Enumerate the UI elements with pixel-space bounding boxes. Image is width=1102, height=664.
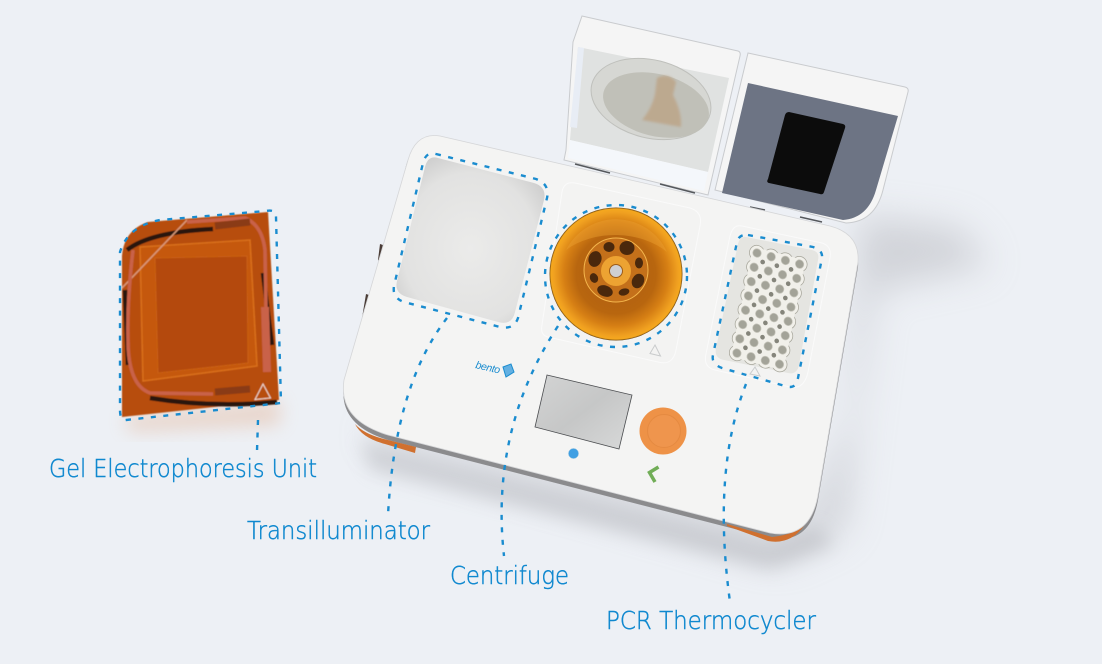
- label: PCR Thermocycler: PCR Thermocycler: [606, 606, 817, 635]
- transilluminator: [396, 157, 545, 323]
- warning icon: centrifuge: [650, 345, 660, 356]
- gel warning icon: [255, 384, 270, 400]
- orange button: [640, 408, 686, 454]
- recess: centrifuge: [542, 183, 701, 363]
- lid frame: [715, 53, 908, 223]
- device side: [343, 141, 858, 539]
- gel tray inner: [155, 256, 248, 373]
- gel plug: [265, 307, 267, 372]
- gel case: [122, 212, 279, 417]
- rotor upper highlight: [566, 219, 667, 252]
- leader: transilluminator: [388, 318, 447, 515]
- side buttons: [362, 244, 383, 320]
- status LED: [568, 448, 578, 458]
- shadow: device: [360, 215, 990, 570]
- rotor inner ring: [584, 238, 648, 302]
- lid reflection disc: [582, 46, 720, 152]
- lid rotor reflection: [642, 76, 681, 127]
- logo icon: [503, 364, 514, 377]
- lid lower lip: [568, 140, 708, 191]
- lid grey panel: [722, 83, 898, 220]
- right lid: thermocycler: [715, 53, 908, 223]
- plate lobes: [728, 244, 808, 374]
- gel lid crease: [122, 220, 187, 288]
- lid window: [570, 47, 729, 172]
- gel red wire: [128, 218, 266, 394]
- gel dark cable: [125, 229, 277, 404]
- rotor hub: [601, 256, 631, 286]
- gel tray frame: [140, 240, 257, 381]
- large wells: [732, 248, 805, 369]
- dashed outline: transilluminator: [394, 153, 548, 328]
- label: Centrifuge: Centrifuge: [450, 561, 569, 590]
- plate centre: [731, 247, 806, 370]
- shadow: gel unit: [124, 400, 280, 432]
- foot: right: [727, 524, 804, 542]
- device body: [343, 136, 858, 534]
- logo: bento: bento: [474, 359, 502, 377]
- lid black window: [767, 112, 845, 194]
- display screen: [535, 375, 632, 449]
- small wells: [743, 259, 794, 358]
- dashed outline: centrifuge: [545, 205, 687, 347]
- recess: thermocycler: [705, 226, 830, 387]
- foot: left: [355, 424, 416, 453]
- PCR well plate: [728, 244, 808, 374]
- green chevron: [650, 467, 658, 482]
- leader: gel unit: [257, 420, 258, 451]
- lid window left glow: [570, 47, 584, 128]
- logo: bento: [474, 359, 514, 377]
- rotor spindle: [610, 264, 622, 278]
- gel electrophoresis unit: [122, 212, 279, 417]
- label: Gel Electrophoresis Unit: Gel Electrophoresis Unit: [49, 454, 317, 483]
- thermocycler bed: [716, 237, 818, 373]
- lid reflection inner: [596, 62, 716, 148]
- dashed outline: gel unit: [120, 211, 281, 420]
- hinge marks: [575, 164, 822, 222]
- label: Transilluminator: Transilluminator: [247, 516, 431, 545]
- centrifuge rotor: [550, 208, 682, 340]
- lid frame: [564, 16, 740, 195]
- rotor tube holes: [587, 241, 647, 299]
- warning icon: thermocycler: [750, 367, 760, 376]
- leader: centrifuge: [502, 326, 558, 556]
- leader: thermocycler: [724, 384, 746, 602]
- gel connectors: [215, 222, 250, 392]
- dashed outline: thermocycler: [713, 235, 822, 387]
- left lid: centrifuge window: [564, 16, 740, 195]
